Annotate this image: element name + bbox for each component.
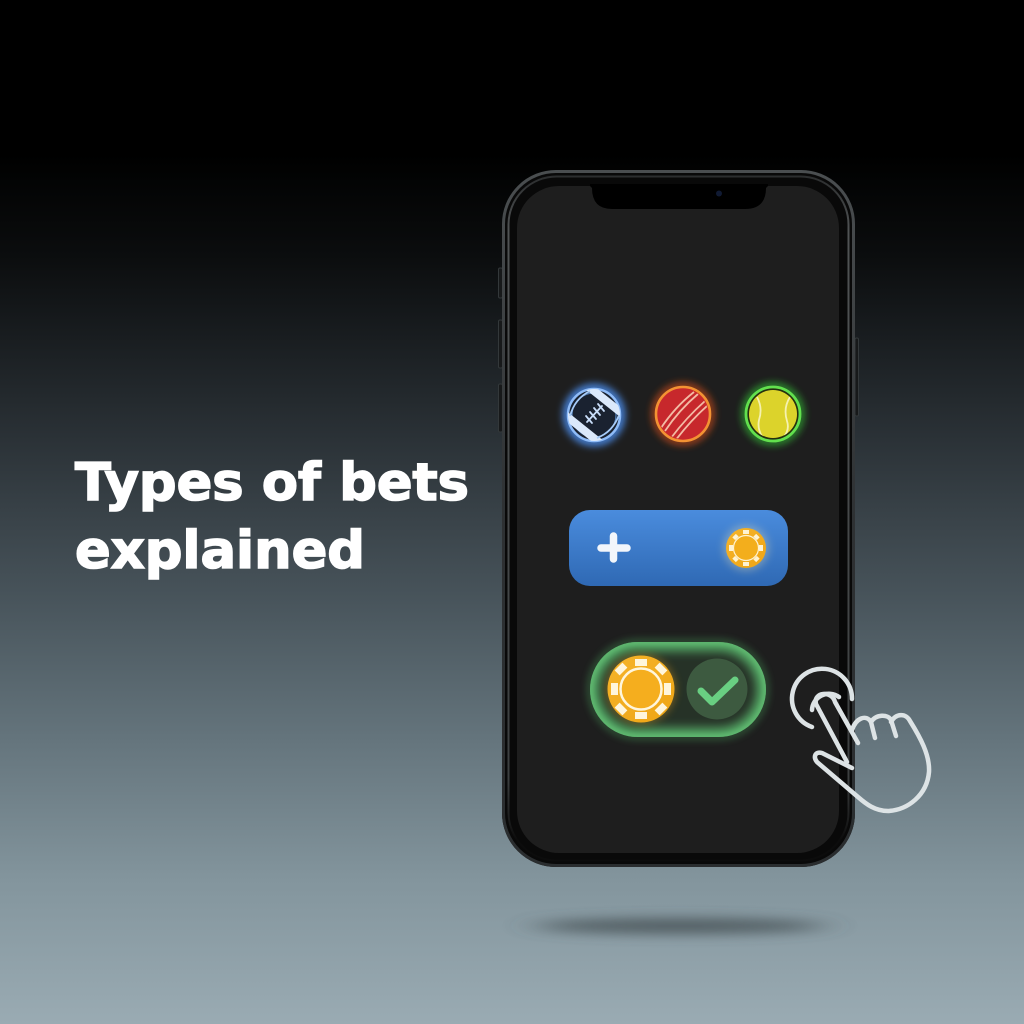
icon: cricket ball xyxy=(655,386,711,442)
title line 2: explained xyxy=(75,521,365,581)
icon: check mark xyxy=(701,680,735,702)
phone screen xyxy=(517,186,839,853)
icon: large chip xyxy=(606,654,676,724)
plus icon xyxy=(601,536,627,559)
icon: small chip xyxy=(723,525,769,571)
knuckles and palm outline xyxy=(815,715,929,811)
camera xyxy=(716,190,722,196)
toggle inner glow xyxy=(590,642,766,737)
button body xyxy=(569,510,788,586)
phone body xyxy=(502,170,855,867)
tap ripples xyxy=(792,669,852,727)
phone metal rim xyxy=(504,172,854,866)
title line 1: Types of bets xyxy=(75,453,469,513)
phone shadow xyxy=(535,918,825,934)
icon: american football xyxy=(565,387,624,443)
sports icons xyxy=(565,386,801,443)
icon: tennis ball xyxy=(745,386,801,442)
toggle body xyxy=(590,642,766,737)
notch xyxy=(590,184,768,209)
phone xyxy=(498,170,858,867)
check circle xyxy=(686,658,748,720)
index finger xyxy=(816,694,858,762)
football laces xyxy=(586,404,604,423)
icon: tapping hand xyxy=(792,669,929,811)
toggle switch xyxy=(590,642,766,737)
phone inner rim xyxy=(508,176,848,860)
side buttons xyxy=(498,268,858,432)
title xyxy=(75,453,469,581)
plus button xyxy=(569,510,788,586)
toggle outer glow xyxy=(590,642,766,737)
